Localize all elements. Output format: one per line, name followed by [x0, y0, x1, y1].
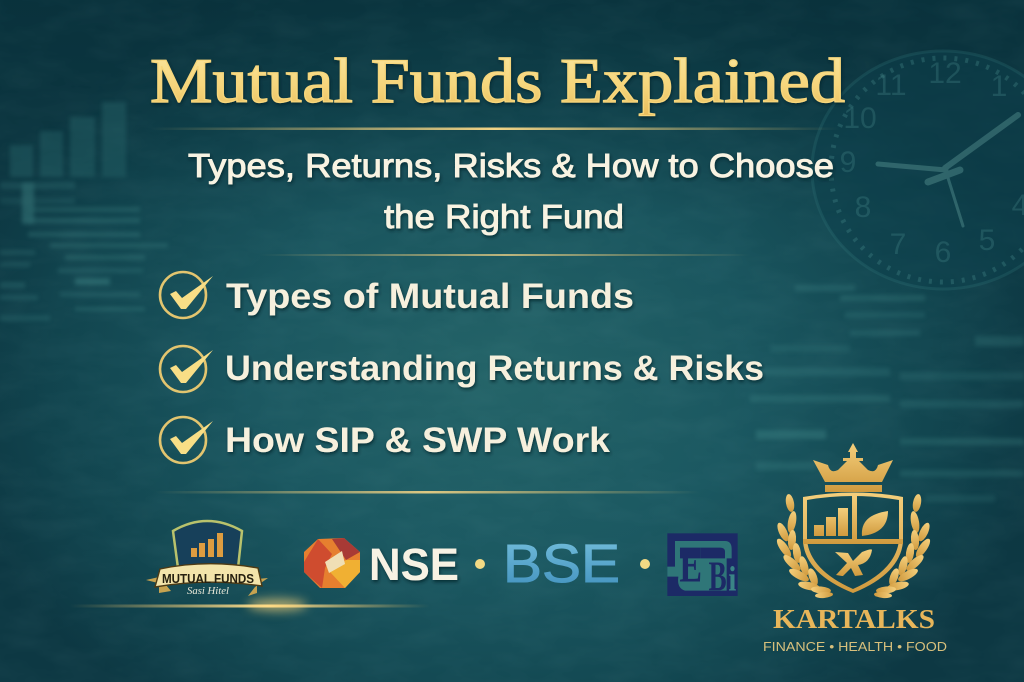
item text: Types of Mutual Funds [226, 277, 634, 316]
logo: NSE [304, 538, 459, 590]
icon: crossed fork and leaf [835, 549, 872, 576]
icon: check circle [160, 272, 213, 318]
brand name: KARTALKS [773, 604, 935, 634]
clock numerals: 6 [935, 236, 951, 269]
clock numerals [840, 57, 1024, 269]
badge banner text: MUTUAL FUNDS [162, 572, 254, 586]
check item: how sip and swp work [160, 417, 611, 463]
item text: Understanding Returns & Risks [225, 349, 764, 388]
clock numerals: 8 [855, 191, 871, 224]
clock hands [878, 115, 1018, 226]
checklist [160, 272, 764, 463]
icon: leaf [862, 511, 888, 536]
bottom light streak [70, 599, 430, 611]
clock numerals: 1 [991, 70, 1007, 103]
lower rule [155, 491, 700, 494]
title rule [150, 128, 840, 130]
brand tagline: FINANCE • HEALTH • FOOD [763, 639, 947, 654]
check item: understanding returns and risks [160, 346, 764, 392]
logo: SEBI [667, 533, 738, 601]
clock numerals: 10 [843, 102, 877, 135]
subtitle rule [260, 254, 750, 256]
background coin stacks left [0, 182, 168, 321]
separator dot [640, 559, 650, 569]
icon: bars [814, 508, 848, 536]
check item: types of mutual funds [160, 272, 634, 318]
clock numerals: 9 [840, 146, 856, 179]
nse octagon mark [304, 538, 360, 588]
icon: crown [813, 443, 893, 492]
icon: check circle [160, 346, 213, 392]
clock numerals: 7 [890, 228, 906, 261]
logo: SEBI: i [728, 560, 737, 599]
background clock [812, 51, 1024, 289]
subtitle [188, 147, 834, 235]
icon: shield [803, 492, 903, 593]
nse wordmark: NSE [369, 539, 459, 590]
badge signature: Sasi Hitel [187, 586, 229, 597]
logo: mutual funds badge [146, 521, 268, 597]
background coin stacks right [750, 285, 1024, 502]
logo: Kartalks crest [763, 443, 947, 654]
right laurel [874, 493, 933, 599]
subtitle: Types, Returns, Risks & How to Choose [188, 147, 834, 184]
background bar chart [10, 102, 126, 177]
sebi letters: E [679, 540, 702, 593]
subtitle: the Right Fund [384, 198, 624, 235]
separator dot [475, 559, 485, 569]
title: Mutual Funds Explained [150, 45, 845, 116]
icon: check circle [160, 417, 213, 463]
clock numerals: 11 [875, 69, 907, 102]
clock numerals: 12 [928, 57, 962, 90]
item text: How SIP & SWP Work [225, 421, 611, 460]
logo: SEBI: B [709, 554, 727, 601]
clock numerals: 5 [979, 224, 995, 257]
left laurel [774, 493, 833, 599]
badge bars [191, 533, 223, 557]
shield dividers [803, 495, 903, 544]
logo: BSE: BSE [503, 534, 620, 594]
